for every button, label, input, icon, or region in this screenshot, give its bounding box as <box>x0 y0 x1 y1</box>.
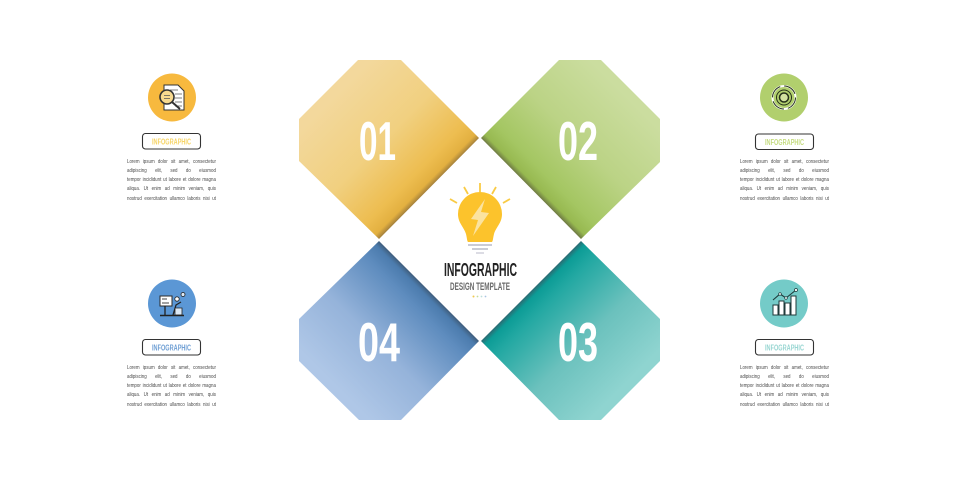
text block: aliqua. Ut enim ad minim veniam, quis <box>740 392 829 398</box>
number 02: 02 <box>558 110 598 172</box>
label pill <box>142 339 202 356</box>
page dots <box>472 296 486 298</box>
icon: document and magnifier <box>148 74 196 122</box>
panel: 04 <box>299 241 479 420</box>
text block: aliqua. Ut enim ad minim veniam, quis <box>127 186 216 192</box>
title: INFOGRAPHIC <box>444 260 517 280</box>
text block: Lorem ipsum dolor sit amet, consectetur <box>740 159 829 165</box>
text block: nostrud exercitation ullamco laboris nisi ut <box>127 402 216 408</box>
icon: target gear <box>760 74 808 122</box>
number 04: 04 <box>358 311 400 373</box>
text block: Lorem ipsum dolor sit amet, consectetur <box>127 159 216 165</box>
text block: Lorem ipsum dolor sit amet, consectetur <box>740 365 829 371</box>
text block: nostrud exercitation ullamco laboris nisi ut <box>740 196 829 202</box>
icon: growth chart <box>760 280 808 328</box>
text block: tempor incididunt ut labore et dolore magna <box>740 177 829 183</box>
icon: presentation board <box>148 280 196 328</box>
text block <box>740 159 829 202</box>
text block: tempor incididunt ut labore et dolore magna <box>740 383 829 389</box>
text block: nostrud exercitation ullamco laboris nisi ut <box>740 402 829 408</box>
panel: 01 <box>299 60 479 239</box>
label pill: INFOGRAPHIC <box>765 344 804 352</box>
number 03: 03 <box>558 311 598 373</box>
text block <box>740 365 829 408</box>
text block: aliqua. Ut enim ad minim veniam, quis <box>127 392 216 398</box>
panel: left top block <box>127 74 216 202</box>
label pill <box>754 134 814 150</box>
text block: Lorem ipsum dolor sit amet, consectetur <box>127 365 216 371</box>
text block: adipiscing elit, sed do eiusmod <box>740 374 829 380</box>
label pill <box>754 339 814 356</box>
text block <box>127 159 216 202</box>
text block: tempor incididunt ut labore et dolore magna <box>127 177 216 183</box>
panel: right top block <box>740 74 829 202</box>
text block: aliqua. Ut enim ad minim veniam, quis <box>740 186 829 192</box>
subtitle: DESIGN TEMPLATE <box>450 281 510 293</box>
label pill <box>142 133 202 150</box>
number 01: 01 <box>359 110 396 172</box>
panel: right bottom block <box>740 280 829 408</box>
text block: adipiscing elit, sed do eiusmod <box>740 168 829 174</box>
text block: tempor incididunt ut labore et dolore magna <box>127 383 216 389</box>
text block: adipiscing elit, sed do eiusmod <box>127 374 216 380</box>
panel: 03 <box>481 241 660 420</box>
panel: left bottom block <box>127 280 216 408</box>
panel: 02 <box>481 60 660 239</box>
label pill: INFOGRAPHIC <box>152 344 191 352</box>
label pill: INFOGRAPHIC <box>152 138 191 146</box>
text block: nostrud exercitation ullamco laboris nisi ut <box>127 196 216 202</box>
icon: light bulb <box>450 183 510 253</box>
text block: adipiscing elit, sed do eiusmod <box>127 168 216 174</box>
text block <box>127 365 216 408</box>
label pill: INFOGRAPHIC <box>765 138 804 147</box>
